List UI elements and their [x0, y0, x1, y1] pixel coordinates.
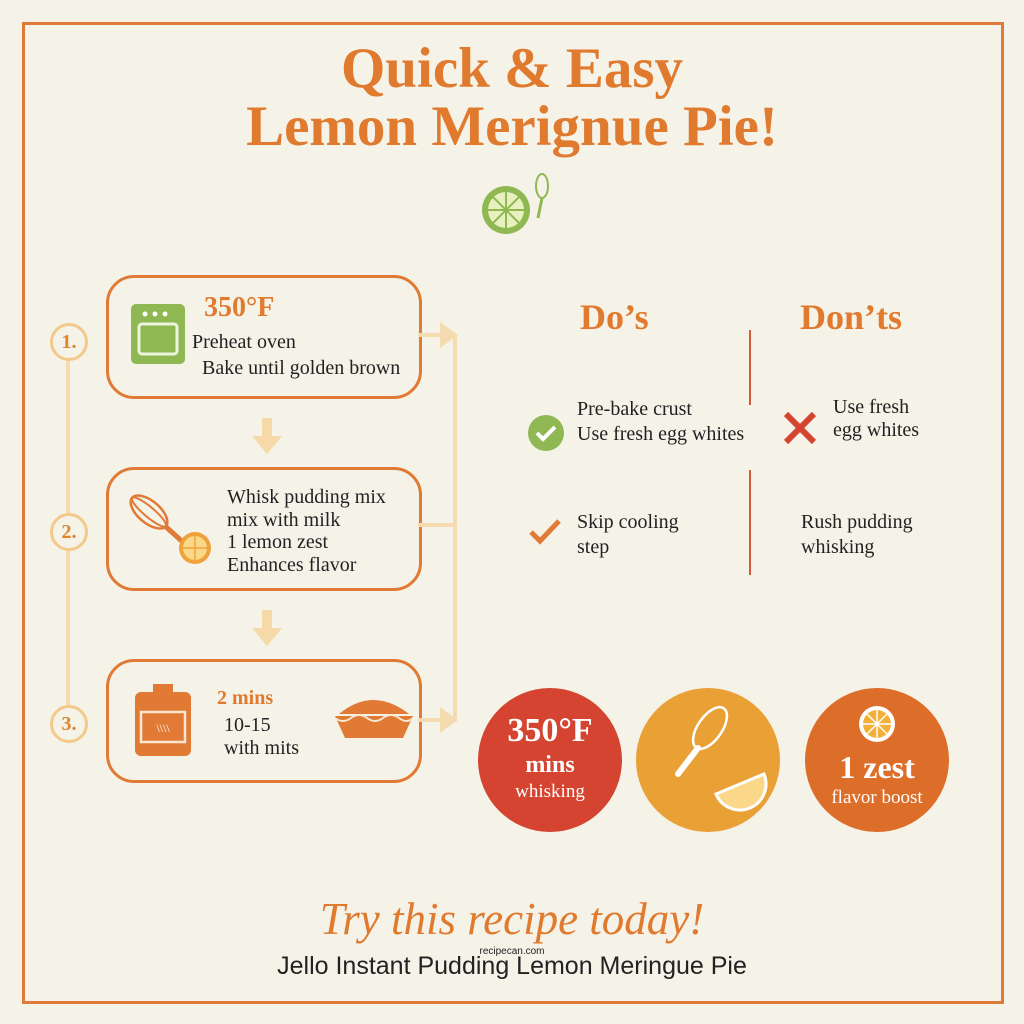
- footer subtitle: Jello Instant Pudding Lemon Meringue Pie: [277, 952, 747, 980]
- dont 2: whisking: [801, 536, 874, 558]
- stat circle zest: 1 zest: [839, 749, 915, 785]
- do's heading: Do’s: [580, 297, 649, 337]
- dont 1: Use fresh: [833, 396, 909, 418]
- stat circle zest: [805, 688, 949, 832]
- connector to right: [418, 322, 458, 733]
- step number 3: [50, 705, 88, 743]
- dont 2: [801, 511, 913, 558]
- stat circle red: mins: [525, 752, 575, 778]
- icon: pie: [334, 700, 414, 738]
- stat circle zest: flavor boost: [831, 787, 923, 808]
- do 1: Use fresh egg whites: [577, 423, 744, 445]
- icon: orange oven: \\\\: [156, 721, 170, 735]
- timeline line: [66, 340, 70, 725]
- icon: orange oven: [135, 684, 191, 756]
- step number 3: 3.: [62, 713, 76, 735]
- step 2 text: [227, 486, 386, 576]
- step number 1: 1.: [62, 331, 76, 353]
- step 2 box: [106, 467, 422, 591]
- step 2 text: mix with milk: [227, 508, 340, 530]
- dont 2: Rush pudding: [801, 511, 913, 533]
- step 2 text: 1 lemon zest: [227, 531, 328, 553]
- icon: red x: [784, 412, 816, 444]
- step 1 box: Bake until golden brown: [202, 357, 400, 379]
- don'ts heading: Don’ts: [800, 297, 902, 337]
- step 3 text: 2 mins: [217, 687, 273, 709]
- icon: check circle: [528, 415, 564, 451]
- icon: lemon and whisk: [482, 173, 549, 234]
- step number 2: [50, 513, 88, 551]
- step 2 text: Enhances flavor: [227, 554, 356, 576]
- do 2: step: [577, 536, 609, 558]
- do 1: Pre-bake crust: [577, 398, 692, 420]
- icon: green oven: [131, 304, 185, 364]
- do 2: Skip cooling: [577, 511, 679, 533]
- arrow down 2: [252, 610, 282, 646]
- step 3 box: 10-15: [224, 714, 271, 736]
- stat circle red: whisking: [515, 781, 585, 802]
- step 2 text: Whisk pudding mix: [227, 486, 386, 508]
- stat circle red: 350°F: [507, 712, 593, 749]
- stat circle whisk: [636, 688, 780, 832]
- dont 1: [784, 396, 919, 444]
- step 1 box: Preheat oven: [192, 331, 296, 353]
- do 2: [529, 511, 679, 558]
- icon: whisk with lemon: [129, 494, 211, 564]
- arrow down 1: [252, 418, 282, 454]
- title: Lemon Merignue Pie!: [246, 95, 778, 158]
- do 1: [528, 398, 744, 451]
- source: recipecan.com: [479, 946, 545, 957]
- title: [246, 37, 778, 158]
- step 3 box: with mits: [224, 737, 299, 759]
- footer call to action: Try this recipe today!: [320, 894, 704, 944]
- step 1 text: 350°F: [204, 292, 274, 323]
- title: Quick & Easy: [341, 37, 683, 100]
- step number 1: [50, 323, 88, 361]
- step 1 box: [106, 275, 422, 399]
- stat circle red: [478, 688, 622, 832]
- icon: orange check: [529, 519, 561, 545]
- step number 2: 2.: [62, 521, 76, 543]
- step 3 box: [106, 659, 422, 783]
- dividers: [749, 330, 751, 405]
- dont 1: egg whites: [833, 419, 919, 441]
